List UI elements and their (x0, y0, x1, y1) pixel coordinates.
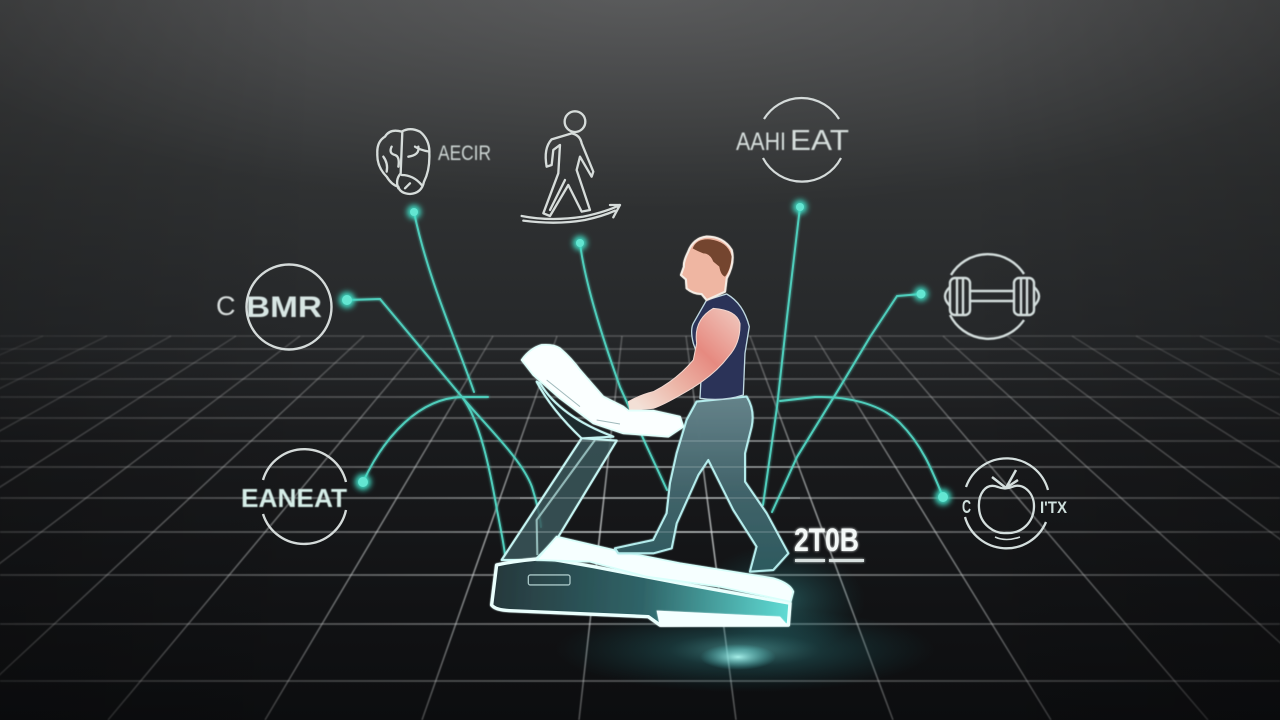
label: EANEAT: EANEAT (241, 483, 347, 513)
treadmill (492, 382, 793, 627)
icon: dumbbell ring (945, 254, 1039, 339)
icon: AAHIEAT ring with label (736, 98, 849, 182)
label: C: C (962, 497, 971, 517)
connector: apple to treadmill (780, 397, 943, 497)
treadmill console (522, 345, 683, 437)
icon: apple ring with label (962, 458, 1068, 548)
treadmill belt (537, 537, 793, 602)
icon: EANEAT ring with label (241, 449, 347, 544)
icon: BMR ring with label (216, 264, 332, 350)
connector: junction to treadmill base (462, 397, 505, 555)
tank top (692, 294, 749, 399)
label: AECIR: AECIR (438, 142, 491, 165)
treadmill base slot (528, 575, 570, 585)
legs (615, 397, 788, 572)
treadmill uprights (502, 382, 617, 560)
connector lines (347, 207, 943, 555)
stat callout: 2T0B: 2T0B (794, 522, 859, 558)
label: ITX: I'TX (1040, 498, 1068, 517)
connector: walking to treadmill (580, 243, 667, 490)
grid lines seen through figure (500, 441, 800, 532)
label: AAHIEAT: EAT (790, 125, 849, 157)
label: C: C (216, 291, 236, 321)
floor glow under treadmill (555, 545, 935, 692)
icon: walking figure on board (522, 111, 620, 223)
perspective floor grid (0, 336, 1280, 720)
label: AAHIEAT: AAHI (736, 128, 786, 156)
connector: AAHIEAT to treadmill (763, 207, 800, 505)
treadmill base (492, 558, 790, 625)
icon: brain with label (377, 129, 491, 194)
treadmill lower rim (657, 611, 788, 627)
arm (628, 308, 740, 411)
connector: EANEAT to treadmill (363, 397, 488, 482)
connector: dumbbell to treadmill (772, 294, 921, 512)
hair (693, 239, 732, 277)
connector dots (339, 200, 951, 505)
head (681, 237, 733, 300)
connector: BMR to treadmill (347, 299, 541, 527)
connector: brain to treadmill (414, 212, 474, 392)
label: BMR: BMR (246, 291, 322, 324)
runner figure (615, 237, 788, 572)
